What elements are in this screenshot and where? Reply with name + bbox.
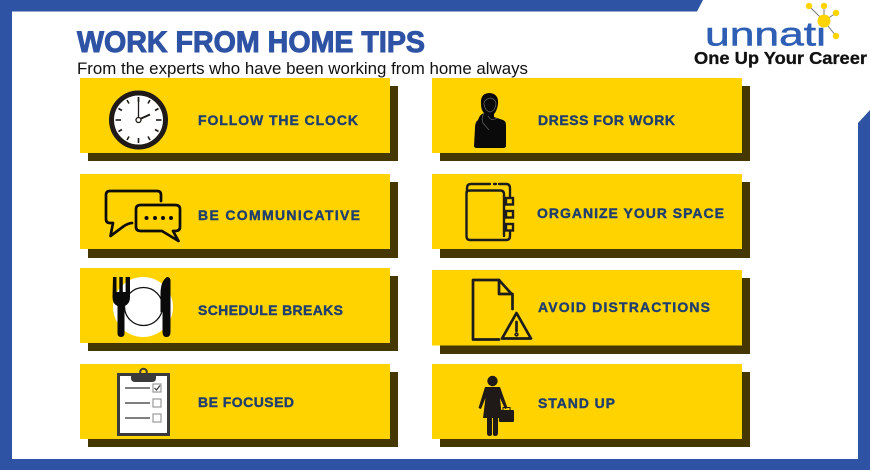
icon: document warning <box>473 280 531 340</box>
label: BE FOCUSED <box>198 394 294 410</box>
label: STAND UP <box>538 395 615 411</box>
icon: clock <box>112 93 166 147</box>
logo: unnati <box>694 3 867 68</box>
panel: follow the clock <box>80 78 398 161</box>
panel: organize your space <box>432 174 750 258</box>
label: AVOID DISTRACTIONS <box>538 299 710 315</box>
icon: plate and cutlery <box>112 277 173 337</box>
panel: schedule breaks <box>80 268 398 351</box>
icon: notebook <box>466 184 513 240</box>
logo molecule icon <box>806 3 839 39</box>
icon: speech bubbles <box>106 191 180 241</box>
label: BE COMMUNICATIVE <box>198 207 360 223</box>
subtitle: From the experts who have been working from home always <box>77 60 528 78</box>
label: DRESS FOR WORK <box>538 112 675 128</box>
logo wordmark: unnati <box>705 16 826 52</box>
label: FOLLOW THE CLOCK <box>198 112 358 128</box>
panel: dress for work <box>432 78 750 161</box>
icon: woman with briefcase <box>478 376 514 436</box>
icon: woman bust <box>474 93 506 148</box>
title: WORK FROM HOME TIPS <box>77 26 425 59</box>
panel: avoid distractions <box>432 270 750 354</box>
icon: clipboard <box>118 369 168 434</box>
label: SCHEDULE BREAKS <box>198 302 343 318</box>
panel: stand up <box>432 364 750 447</box>
panel: be communicative <box>80 174 398 258</box>
label: ORGANIZE YOUR SPACE <box>537 205 724 221</box>
logo tagline: One Up Your Career <box>694 48 867 68</box>
panel: be focused <box>80 364 398 447</box>
